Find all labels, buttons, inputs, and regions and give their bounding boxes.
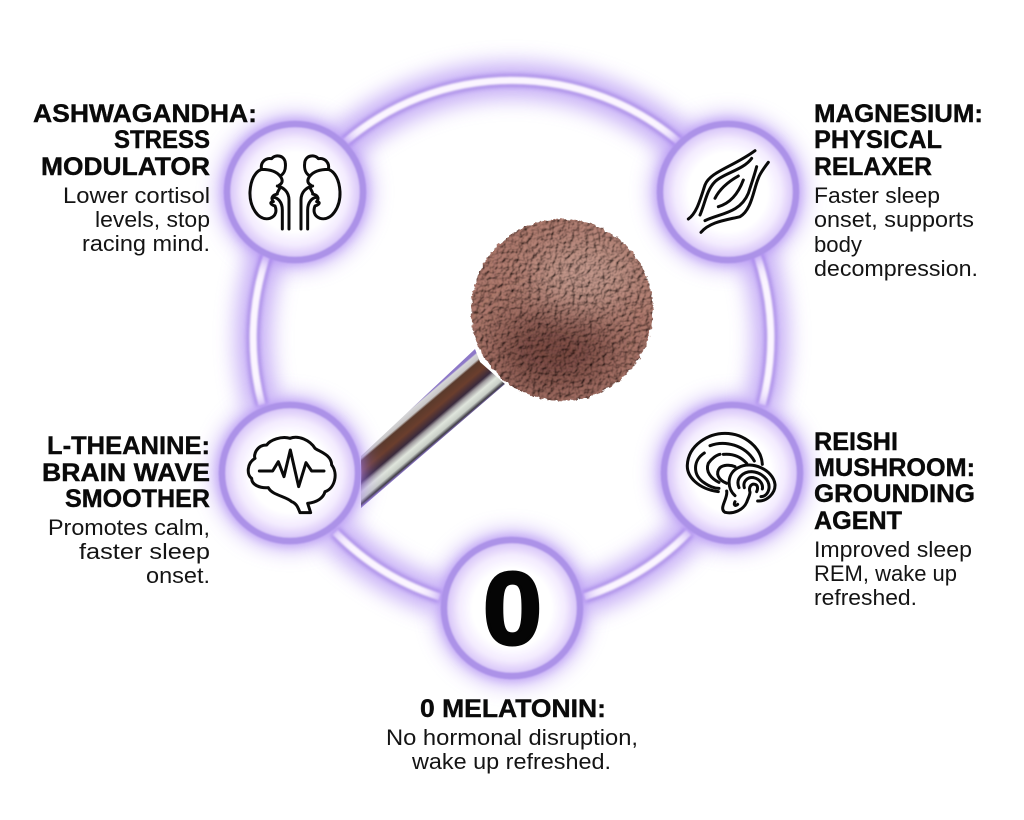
body: l-theanine: Promotes calm, bbox=[48, 515, 210, 540]
icon: brain with pulse bbox=[248, 437, 335, 513]
body: reishi: REM, wake up bbox=[814, 561, 957, 586]
connecting ring bbox=[253, 80, 771, 597]
body: l-theanine bbox=[48, 515, 210, 588]
body: zero melatonin: wake up refreshed. bbox=[411, 749, 611, 774]
body: magnesium: decompression. bbox=[814, 256, 978, 281]
body: reishi bbox=[814, 537, 972, 610]
body: magnesium bbox=[814, 183, 978, 281]
text: l-theanine bbox=[42, 432, 210, 588]
spoon handle bbox=[361, 349, 505, 508]
body: ashwagandha bbox=[63, 183, 210, 256]
body: magnesium: Faster sleep bbox=[814, 183, 940, 208]
body: ashwagandha: racing mind. bbox=[82, 231, 210, 256]
text: magnesium bbox=[814, 100, 983, 281]
body: magnesium: onset, supports bbox=[814, 207, 974, 232]
body: zero melatonin bbox=[386, 725, 638, 774]
text: reishi bbox=[814, 428, 975, 610]
icon: mushrooms bbox=[687, 433, 775, 513]
heading: reishi: GROUNDING bbox=[814, 480, 975, 508]
heading: ashwagandha: MODULATOR bbox=[41, 153, 210, 181]
powder scoop bbox=[471, 219, 653, 401]
body: zero melatonin: No hormonal disruption, bbox=[386, 725, 638, 750]
heading: reishi bbox=[814, 428, 975, 535]
icon: kidneys bbox=[250, 156, 340, 229]
heading: ashwagandha: ASHWAGANDHA: bbox=[33, 100, 257, 128]
node: l-theanine brain bbox=[214, 397, 366, 549]
body: l-theanine: onset. bbox=[146, 563, 210, 588]
body: l-theanine: faster sleep bbox=[79, 539, 210, 564]
body: ashwagandha: levels, stop bbox=[95, 207, 210, 232]
heading: reishi: REISHI bbox=[814, 428, 898, 456]
heading: magnesium: MAGNESIUM: bbox=[814, 100, 983, 128]
icon: muscle fibres bbox=[688, 151, 768, 232]
heading: magnesium bbox=[814, 100, 983, 181]
body: reishi: refreshed. bbox=[814, 585, 917, 610]
heading: l-theanine: L-THEANINE: bbox=[47, 432, 210, 460]
spoon of powder bbox=[361, 219, 653, 508]
heading: magnesium: PHYSICAL bbox=[814, 126, 942, 154]
text: zero melatonin bbox=[386, 695, 638, 774]
heading: zero melatonin: 0 MELATONIN: bbox=[420, 695, 606, 723]
text: ashwagandha bbox=[33, 100, 257, 256]
heading: ashwagandha bbox=[33, 100, 257, 181]
heading: ashwagandha: STRESS bbox=[114, 126, 210, 154]
icon: big zero: 0 bbox=[483, 551, 542, 666]
heading: reishi: AGENT bbox=[814, 507, 902, 535]
heading: reishi: MUSHROOM: bbox=[814, 454, 975, 482]
node: ashwagandha kidneys bbox=[219, 116, 371, 268]
heading: l-theanine: SMOOTHER bbox=[65, 485, 210, 513]
heading: l-theanine: BRAIN WAVE bbox=[42, 459, 210, 487]
heading: magnesium: RELAXER bbox=[814, 153, 932, 181]
body: ashwagandha: Lower cortisol bbox=[63, 183, 210, 208]
node: magnesium muscle bbox=[652, 116, 804, 268]
body: reishi: Improved sleep bbox=[814, 537, 972, 562]
body: magnesium: body bbox=[814, 232, 862, 257]
node: zero melatonin bbox=[436, 532, 588, 684]
node: reishi mushroom bbox=[656, 397, 808, 549]
heading: l-theanine bbox=[42, 432, 210, 513]
